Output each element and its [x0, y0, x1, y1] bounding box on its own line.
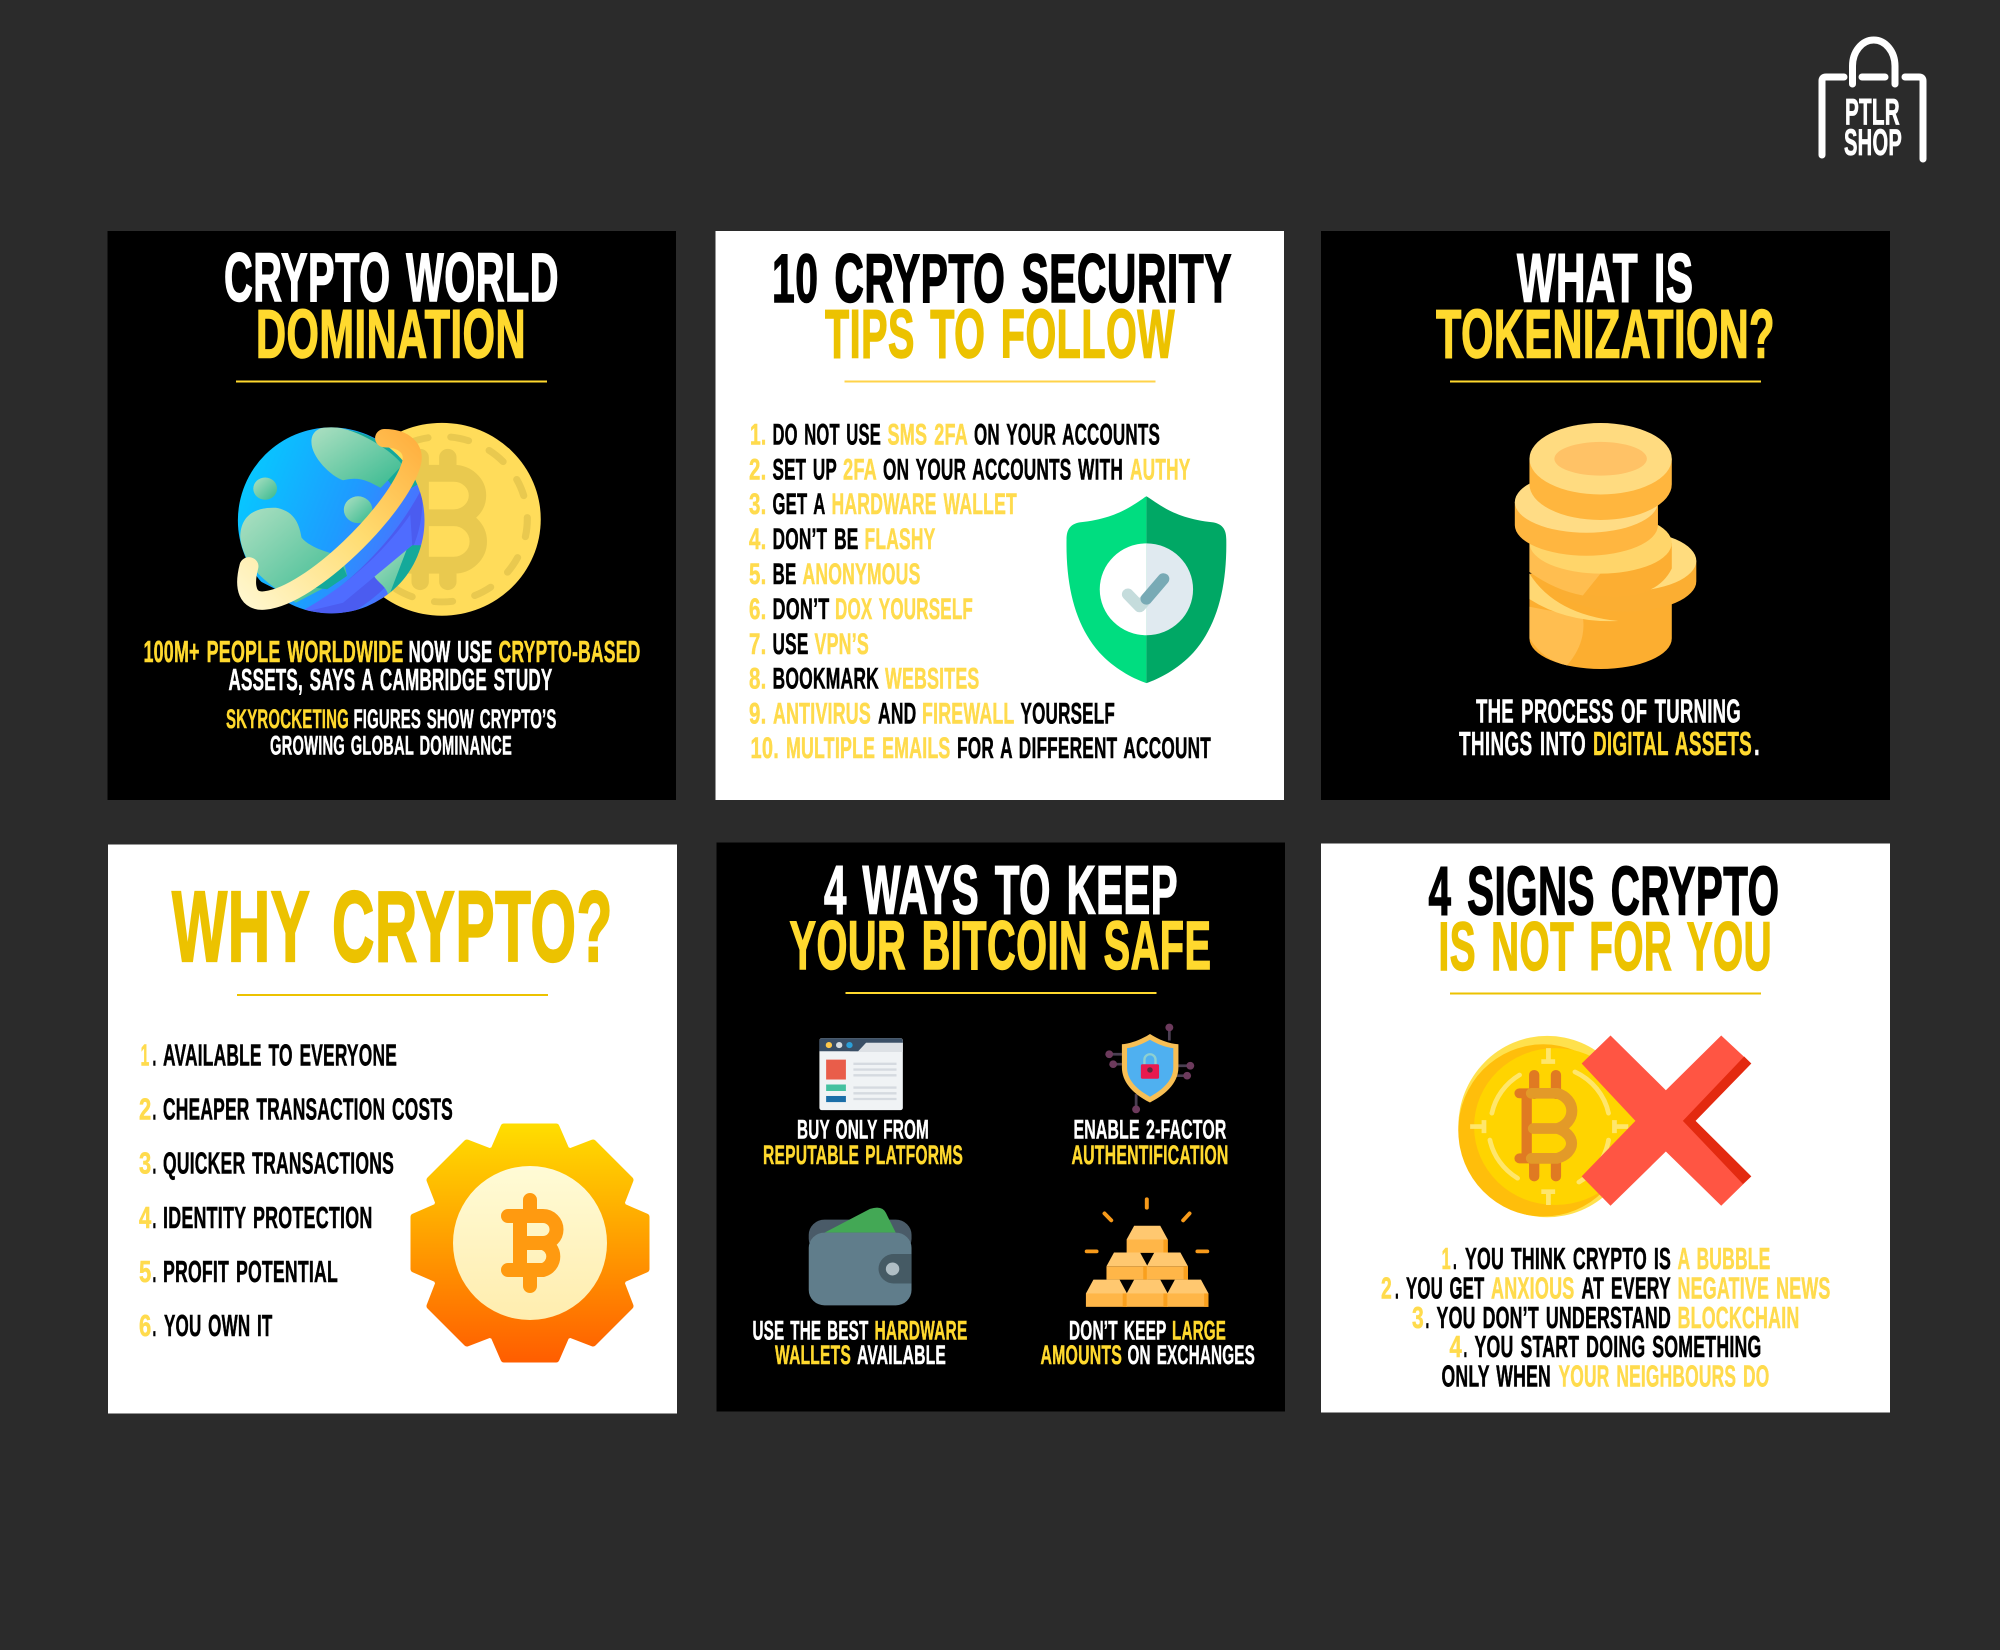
- list: ten security tips: FLASHY: [864, 523, 936, 556]
- list: ten security tips: DON’T BE: [772, 523, 858, 556]
- text: process of turning things into digital assets: THE PROCESS OF TURNING: [1476, 694, 1741, 730]
- list: six reasons: 6: [139, 1309, 152, 1343]
- heading: 4 ways to keep your bitcoin safe: 4 WAYS TO KEEP: [824, 852, 1178, 928]
- panel: what is tokenization: [1321, 231, 1890, 800]
- list: six reasons: 4: [139, 1201, 152, 1235]
- list: four signs: [1381, 1242, 1830, 1394]
- list: six reasons: IDENTITY PROTECTION: [163, 1201, 372, 1235]
- text: enable 2-factor authentification: ENABLE 2-FACTOR: [1074, 1114, 1226, 1144]
- list: four signs: YOU START DOING SOMETHING: [1474, 1330, 1762, 1364]
- text: don't keep large amounts: AMOUNTS: [1040, 1340, 1122, 1370]
- text: don't keep large amounts: ON EXCHANGES: [1128, 1340, 1255, 1370]
- list: ten security tips: SET UP: [772, 454, 837, 486]
- list: six reasons: .: [152, 1146, 156, 1180]
- icon: globe with bitcoin coin: [238, 423, 541, 618]
- panel: 4 ways to keep bitcoin safe: [716, 842, 1285, 1412]
- heading: 4 ways to keep your bitcoin safe: YOUR BITCOIN SAFE: [790, 907, 1212, 984]
- icon: wallet: [809, 1208, 912, 1305]
- list: four signs: NEGATIVE NEWS: [1678, 1272, 1830, 1306]
- list: six reasons: AVAILABLE TO EVERYONE: [163, 1038, 397, 1072]
- list: four signs: 3: [1412, 1301, 1424, 1335]
- text: process of turning things into digital assets: .: [1754, 726, 1760, 763]
- list: ten security tips: [749, 418, 1211, 765]
- list: six reasons: 1: [140, 1038, 150, 1072]
- list: six reasons: .: [152, 1309, 156, 1343]
- text: best hardware wallets: HARDWARE: [874, 1316, 968, 1346]
- list: ten security tips: DON’T: [772, 593, 830, 626]
- text: don't keep large amounts: LARGE: [1172, 1316, 1226, 1346]
- list: ten security tips: AND: [878, 698, 916, 730]
- list: ten security tips: 5.: [749, 558, 766, 591]
- heading: what is tokenization: [1436, 240, 1775, 372]
- icon: browser window: [819, 1038, 903, 1110]
- text: skyrocketing figures: FIGURES SHOW CRYPTO’S: [354, 704, 556, 734]
- heading: 10 crypto security tips to follow: 10 CRYPTO SECURITY: [772, 240, 1232, 317]
- list: ten security tips: 3.: [749, 488, 766, 521]
- text: process of turning things into digital assets: THINGS INTO: [1459, 726, 1586, 763]
- panel: 4 signs crypto is not for you: [1321, 844, 1890, 1412]
- list: ten security tips: MULTIPLE EMAILS: [786, 732, 950, 765]
- list: four signs: BLOCKCHAIN: [1678, 1301, 1800, 1335]
- heading: 10 crypto security tips to follow: [772, 240, 1232, 372]
- list: ten security tips: 7.: [749, 628, 766, 661]
- list: ten security tips: BE: [772, 558, 796, 591]
- list: six reasons: .: [152, 1201, 156, 1235]
- list: four signs: A BUBBLE: [1678, 1242, 1770, 1276]
- list: four signs: 4: [1450, 1330, 1462, 1364]
- list: four signs: YOU GET: [1406, 1272, 1484, 1306]
- icon: bitcoin gear: [414, 1127, 646, 1359]
- list: ten security tips: 2.: [749, 454, 766, 486]
- list: ten security tips: 10.: [750, 732, 779, 765]
- text: buy only from reputable platforms: REPUTABLE PLATFORMS: [763, 1140, 963, 1170]
- list: four signs: .: [1395, 1272, 1399, 1306]
- heading: 4 ways to keep your bitcoin safe: [790, 852, 1212, 984]
- icon: gold bars: [1086, 1199, 1208, 1307]
- heading: 4 signs crypto is not for you: [1428, 852, 1780, 985]
- list: ten security tips: FIREWALL: [922, 698, 1014, 730]
- list: ten security tips: HARDWARE WALLET: [832, 488, 1017, 521]
- list: ten security tips: 1.: [750, 418, 766, 452]
- text: worldwide users: CRYPTO-BASED: [498, 635, 640, 669]
- list: ten security tips: 6.: [749, 593, 766, 626]
- logo: PTLR SHOP bag: PTLR: [1845, 92, 1900, 132]
- text: worldwide users: NOW USE: [408, 635, 492, 669]
- heading: crypto world domination: CRYPTO WORLD: [224, 239, 559, 316]
- text: worldwide users: 100M+ PEOPLE WORLDWIDE: [144, 635, 404, 669]
- list: six reasons: 5: [139, 1255, 152, 1289]
- list: ten security tips: 2FA: [843, 454, 877, 486]
- list: four signs: .: [1464, 1330, 1468, 1364]
- text: don't keep large amounts: [1040, 1316, 1255, 1370]
- heading: crypto world domination: [224, 239, 559, 372]
- list: six reasons: CHEAPER TRANSACTION COSTS: [163, 1092, 453, 1126]
- list: ten security tips: ANONYMOUS: [802, 558, 920, 591]
- text: best hardware wallets: WALLETS: [775, 1340, 851, 1370]
- heading: why crypto: WHY CRYPTO?: [172, 871, 613, 983]
- list: six reasons: 2: [139, 1092, 152, 1126]
- text: worldwide users: ASSETS, SAYS A CAMBRIDGE STUDY: [228, 663, 552, 697]
- list: ten security tips: WEBSITES: [885, 662, 980, 696]
- list: six reasons: .: [152, 1092, 156, 1126]
- list: six reasons: .: [152, 1255, 156, 1289]
- text: buy only from reputable platforms: BUY ONLY FROM: [797, 1114, 929, 1144]
- list: six reasons: QUICKER TRANSACTIONS: [163, 1146, 394, 1180]
- list: ten security tips: FOR A DIFFERENT ACCOUNT: [957, 732, 1211, 765]
- list: ten security tips: GET A: [772, 488, 826, 521]
- list: four signs: YOUR NEIGHBOURS DO: [1558, 1360, 1770, 1394]
- list: six reasons: PROFIT POTENTIAL: [163, 1255, 338, 1289]
- heading: what is tokenization: WHAT IS: [1517, 240, 1694, 316]
- text: don't keep large amounts: DON’T KEEP: [1069, 1316, 1166, 1346]
- icon: bitcoin coin with red cross: [1458, 1036, 1751, 1217]
- text: best hardware wallets: USE THE BEST: [752, 1316, 869, 1346]
- list: four signs: .: [1426, 1301, 1430, 1335]
- list: four signs: AT EVERY: [1582, 1272, 1671, 1306]
- list: six reasons: .: [152, 1038, 156, 1072]
- list: ten security tips: USE: [772, 628, 808, 661]
- text: enable 2-factor authentification: [1072, 1114, 1228, 1170]
- text: best hardware wallets: [752, 1316, 968, 1370]
- list: four signs: 2: [1381, 1272, 1392, 1306]
- list: four signs: YOU DON’T UNDERSTAND: [1436, 1301, 1671, 1335]
- heading: what is tokenization: TOKENIZATION?: [1436, 296, 1775, 372]
- text: skyrocketing figures: [226, 704, 556, 760]
- list: four signs: ONLY WHEN: [1442, 1360, 1551, 1394]
- icon: security shield circuit: [1105, 1024, 1194, 1113]
- text: skyrocketing figures: GROWING GLOBAL DOMINANCE: [270, 730, 512, 760]
- heading: 10 crypto security tips to follow: TIPS TO FOLLOW: [825, 296, 1175, 372]
- list: ten security tips: DO NOT USE: [772, 418, 881, 452]
- list: ten security tips: BOOKMARK: [772, 662, 879, 696]
- text: skyrocketing figures: SKYROCKETING: [226, 704, 349, 734]
- list: four signs: 1: [1442, 1242, 1451, 1276]
- panel: 10 crypto security tips: [716, 231, 1284, 800]
- text: process of turning things into digital assets: DIGITAL ASSETS: [1593, 726, 1752, 763]
- list: ten security tips: ON YOUR ACCOUNTS: [974, 418, 1160, 452]
- list: six reasons: YOU OWN IT: [164, 1309, 272, 1343]
- list: ten security tips: 9.: [749, 698, 766, 730]
- list: four signs: YOU THINK CRYPTO IS: [1465, 1242, 1671, 1276]
- list: ten security tips: VPN’S: [814, 628, 869, 661]
- icon: stack of gold coins: [1515, 423, 1696, 669]
- list: ten security tips: DOX YOURSELF: [835, 593, 973, 626]
- list: ten security tips: 4.: [749, 523, 766, 556]
- list: ten security tips: ANTIVIRUS: [773, 698, 871, 730]
- heading: crypto world domination: DOMINATION: [256, 296, 526, 372]
- list: ten security tips: 8.: [749, 662, 766, 696]
- logo: PTLR SHOP bag: [1822, 40, 1923, 163]
- icon: green shield with check: [1066, 496, 1226, 683]
- text: best hardware wallets: AVAILABLE: [857, 1340, 946, 1370]
- list: ten security tips: AUTHY: [1130, 454, 1190, 486]
- panel: why crypto: [108, 844, 677, 1414]
- list: six reasons: 3: [139, 1146, 152, 1180]
- list: six reasons: [139, 1038, 453, 1343]
- text: buy only from reputable platforms: [763, 1114, 963, 1170]
- list: ten security tips: ON YOUR ACCOUNTS WITH: [883, 454, 1123, 486]
- text: enable 2-factor authentification: AUTHENTIFICATION: [1072, 1140, 1228, 1170]
- logo: PTLR SHOP bag: SHOP: [1844, 122, 1902, 163]
- list: four signs: .: [1453, 1242, 1457, 1276]
- text: process of turning things into digital assets: [1459, 694, 1760, 763]
- list: four signs: ANXIOUS: [1491, 1272, 1574, 1306]
- panel: crypto world domination: [108, 231, 676, 800]
- list: ten security tips: YOURSELF: [1020, 698, 1115, 730]
- list: ten security tips: SMS 2FA: [888, 418, 968, 452]
- text: worldwide users: [144, 635, 640, 697]
